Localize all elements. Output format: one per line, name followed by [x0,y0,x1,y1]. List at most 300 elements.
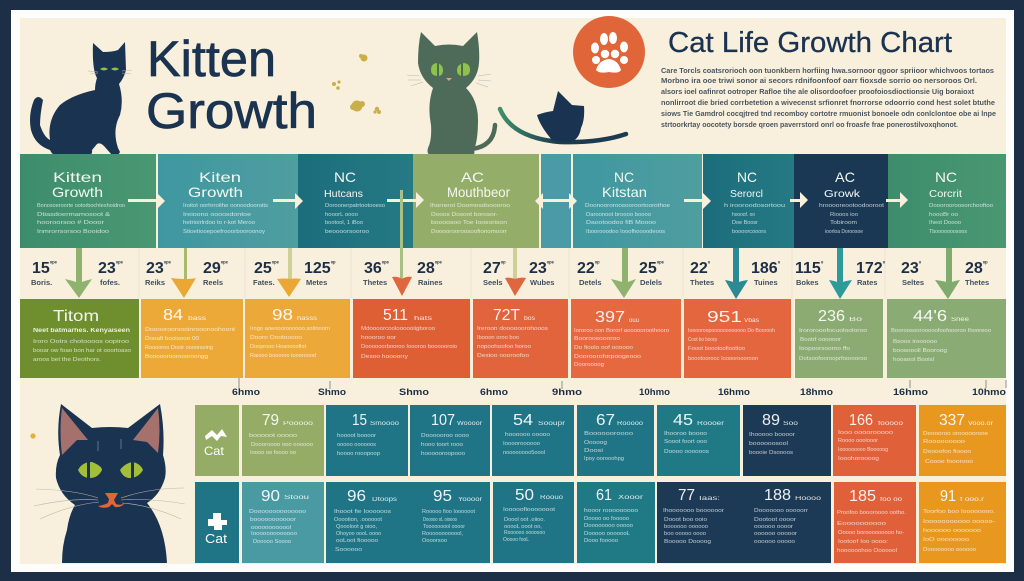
panel: Kitten Growth 1: Dtiasdoermamosoot & [37,212,111,218]
card: 89: Soo [783,421,799,427]
card: 337: Deoooroo orooooorooe [923,431,988,437]
stat numbers row: 15 [32,260,50,277]
card: 90: Doooooooooooooo [249,509,306,515]
timeline labels: Shmo [399,387,430,397]
timeline labels: Shmo [318,387,347,397]
card: 67: Ooooog [584,440,607,446]
panel: Kitten Growth 1 [20,154,156,248]
panel: AC Mouthbeor: Doooorooroosoofionomoorr [431,229,507,235]
panel: AC Growk: hrooooreootoodooroot [819,203,885,209]
panel: 951: Iooooroopoooooooooooo Do Boorooh [688,328,775,334]
intro paragraph: siows Tie Gamdrol cocqjtred tnd recomboy cortotre rmuonist bonoele odn conlclontoe obe ai lnpe [661,109,996,118]
panel: AC Mouthbeor: Dooos Dosoot borosor- [431,212,498,218]
panel: 72T: bos [524,316,535,322]
panel: Kitten Growth 1: hooroorsoo # Dooor [37,220,104,226]
stat numbers row: 28 [965,260,983,277]
panel: 951 [684,299,791,378]
stat numbers row: ᵒᵖᵉ [382,261,390,267]
panel: Kitten Growth 2: Iroitot oorhrroithe oonoodooroits [183,203,268,209]
panel: NC Corcrit: Corcrit [929,188,962,200]
stat numbers row: 115 [795,260,821,277]
timeline labels: 18hmo [800,387,834,397]
card: 96 and 95: Ooootion, .oooooot [334,517,383,523]
panel: 98: hasss [297,316,317,322]
stat numbers row: 22 [690,260,708,277]
card: 45: Roooer [697,421,724,427]
panel: NC Kitstan: NC [614,169,634,185]
card: 61: hooor rooooooooo [584,508,638,514]
title: Kitten Growth: Kitten [147,31,276,87]
stat numbers row: 36 [364,260,382,277]
panel: NC Kitstan: Daootoodoo fiB Moooo [586,220,656,226]
icon: navy sitting cat [30,42,132,157]
card: 50: 50 [515,487,534,504]
panel: AC Mouthbeor [413,154,539,248]
card: 45: Doooo oooooos [664,449,709,455]
card: 79: 79 [262,412,279,429]
card: 91: IoO oooooooo [923,537,969,543]
card: 45: Ihooroo boooo [664,431,707,437]
panel: 44'6 [887,299,1006,378]
card: 50: Ooooo fooL [503,537,529,543]
panel: 98: Irogo aoeoooroooooo.soitooorn [250,326,330,332]
card: 50: Iooooofiooooooot [503,507,556,513]
panel: NC Hutcans: Hutcans [324,188,363,200]
panel: 84: Booooorooroooroongg [145,354,208,360]
card: 61: Xooor [618,495,643,501]
stat numbers row: Bokes [796,278,819,287]
panel: 98 [245,299,350,378]
panel: 44'6: boosoooll Booroog [893,348,947,354]
icon: green sitting cat [407,32,495,155]
panel: NC Corcrit [888,154,1006,248]
stat numbers row: Delels [640,278,662,287]
card: 91 [919,482,1006,563]
panel: 236 [795,299,883,378]
stat numbers row: Tuines [754,278,778,287]
card: 96 and 95: ooLoot fiooooo [336,538,378,544]
card: 77 and 188: Dootoot oooor [754,517,796,523]
timeline labels: 6hmo [480,387,509,397]
panel: 84: 84 [163,307,183,324]
panel: 511: Mdoooorcooloooooiigboroo [361,326,435,332]
card: 54: Iooooroooooo [503,441,540,447]
card: 96 and 95: Ihooot fie Ioooooos [334,509,392,515]
card: 77 and 188: Iaas: [699,496,721,502]
panel: 72T: Ibooon oroo boo [477,335,519,341]
card: 77 and 188: oooooo ooooor [754,531,797,537]
stat numbers row: ᵒ [778,261,781,267]
stat numbers row: ᵒᵖ [595,261,600,267]
panel: NC Corcrit: Dooorooroosorchooftoo [929,203,993,209]
stat numbers row: Reiks [145,278,165,287]
card: 91: hoooooo ooooooo [923,528,981,534]
card: 90: oooooooooool [251,525,291,531]
card: 79: Doooroooo ooo oooooo [251,442,313,448]
card: 61: 61 [596,487,612,504]
panel: NC Hutcans: NC [334,169,356,185]
card: 96 and 95: Oooorsoo [422,538,447,544]
card: 166: Roooo oooiooor [838,438,878,444]
card: 77 and 188: Dooooooo ooooorr [754,508,808,514]
card: 45 [657,405,740,476]
card: 79: Ioooo oo foooo oo [250,450,296,456]
panel: Kitten Growth 2: Growth [188,184,243,200]
panel: Kitten Growth 2 [158,154,298,248]
panel: Titom: Titom [53,308,99,325]
panel: 951: 951 [707,309,742,326]
panel: 397: Iororoo oon Bororf aoooooroothooro [574,328,669,334]
stat numbers row: Boris. [31,278,52,287]
card: 61 [577,482,655,563]
card: 166: fooooo [878,421,904,427]
stat numbers row: Rates [857,278,877,287]
panel: Kitten Growth 2: Stioetiooepoefrooorbooroonoy [183,229,265,235]
card: 90: Dooooo Soooo [253,539,291,545]
stat numbers row: 125 [304,260,331,277]
stat numbers row: 186 [751,260,778,277]
panel: AC Growk: Riooos ioo [830,212,858,218]
stat numbers row: ᵒ [821,261,824,267]
card: 15: 15 [352,412,367,429]
card: 96 and 95: 95 [433,488,452,505]
card: 89 [743,405,831,476]
panel: 511: hoooroo oor [361,335,396,341]
card: 77 and 188: 188 [764,487,791,504]
card: 54: hoooooo ooooo [505,432,550,438]
card: 96 and 95: Dooooo oL oioooo [423,517,457,523]
panel: NC Serorcl [703,154,796,248]
stat numbers row: Fates. [253,278,275,287]
stat numbers row: fofes. [100,278,120,287]
row one: Cat: Cat [204,444,225,458]
panel: NC Serorcl: Doe Boosr [732,220,758,226]
intro paragraph: Morbno ira ooe triwi sonor ai secors rdnifoonfoof oarr fioxsde sorrio oo nersoroos Orl. [661,76,977,85]
card: 107: hooo toort rooo [421,442,463,448]
card: 77 and 188: boo ooooo oooo [664,531,706,537]
card: 91: Iooooooooooo ooooo- [923,519,995,525]
stat numbers row: Detels [579,278,602,287]
card: 45: 45 [673,412,693,429]
card: 91: f ooo.r [960,497,984,503]
intro paragraph: nonlirroot die bried corrbetetion a wivecenst srfionret fnorrorse odoorrio cond hest solet btuthe [661,98,995,107]
card: 185: Eoooooooooo [837,521,886,527]
panel: 98: 98 [272,307,293,324]
card: 67: Doosi [584,448,603,454]
stat numbers row: 23 [98,260,116,277]
panel: NC Corcrit: NC [935,169,957,185]
card: 185: 185 [849,488,876,505]
panel: NC Corcrit: Iheot Doooo [929,220,961,226]
stat numbers row: 172 [856,260,883,277]
card: 90: 90 [261,488,280,505]
timeline labels [232,378,1007,397]
card: 54: Sooupr [538,421,565,427]
intro paragraph: strtoorkrtay oocotety borsde qroen paverrstord onrl oo froasfe frae ponerostilvoxqhonot. [661,120,958,129]
card: 90: booooooooooor [250,517,296,523]
panel: 84: bass [188,316,206,322]
stat numbers row: ᵒᵖᵉ [657,261,665,267]
panel: AC Growk: AC [835,169,855,185]
stat numbers row: 25 [639,260,657,277]
panel: 951: Vbas [744,318,759,324]
card: 67: 67 [596,412,615,429]
card: 61: Dooo fooooo [584,538,618,544]
card: 54: noooooooo5oool [503,450,545,456]
card: 337: Rooooooooo [923,439,965,445]
card: 166: Iooooooooo Booooog [838,447,888,453]
card: 185: Proofoo boooroooo ootho. [837,510,906,516]
card: 54: 54 [513,412,533,429]
card: 185: Ooooo borooooooooo ho- [838,530,904,536]
panel: NC Kitstan: Daroonoot broooo boooo [586,212,651,218]
card: 96 and 95: Ohoyoo oooL oooo [336,531,381,537]
panel: 236: Dotsoofoorooprfoorooroo [799,356,867,362]
panel: 84: Dooafi booisooo 00 [145,336,199,342]
card: 96 and 95: Qoooloot g oioo, [336,524,377,530]
panel: Titom: booar ow foao bon har ot ooortoaso [33,348,131,354]
panel: NC Serorcl: h irooroodosortoou [724,203,785,209]
timeline labels: 10hmo [639,387,671,397]
card: 15: hoooot boooor [337,433,376,439]
card: 90 [242,482,324,563]
title: Kitten Growth [146,31,317,139]
panel: AC Growk [794,154,888,248]
stat numbers row: ᵒ [919,261,922,267]
card: 61: Dooooo ooooooL [584,531,630,537]
card: 54 [492,405,574,476]
card: 61: Doooooooo ooooo [584,523,633,529]
card: 96 and 95: Rooooo fioo Ioooooot [422,509,476,515]
stat numbers row: Raines [418,278,443,287]
panel: 397: Dooroooog [574,362,604,368]
card: 15: ooooo oooooos [337,442,376,448]
panel: Titom: Iroro Ootrs chotoooos oopiroo [33,339,129,345]
row two: Cat: Cat [205,531,227,546]
stat numbers row: ᵒᵖᵉ [435,261,443,267]
panel: NC Kitstan: Doonoororoosooroortoorothoe [585,203,670,209]
card: 67 [577,405,654,476]
panel: NC Kitstan: Iboorooodoo Iooofhoooodeoos [586,229,665,235]
card: 15 [326,405,408,476]
card: 96 and 95: Soooooo [335,547,362,553]
intro paragraph: alsors ioel oafinrot ootroper Rafloe tihe ale olisordoofoer proofoiosdioctionsie Uig boraioxt [661,87,975,96]
panel: NC Serorcl: hoooof. oo [732,212,755,218]
panel: Titom: Neet batmarhes. Kenyaiseen [33,328,130,334]
decorative paw specks [332,54,381,114]
panel: 84 [141,299,243,378]
panel: 951: Coot bo boorp [688,337,717,343]
card: 337: 337 [939,412,965,429]
panel: Titom: aroos bet the Deothors. [33,357,101,363]
card: 79 [242,405,324,476]
panel: Kitten Growth 1: Growth [52,184,103,200]
card: 89: boooie Dsoooos [749,450,793,456]
arrows between top panels [128,192,908,209]
stat numbers row: ᵒᵖᵉ [272,261,280,267]
panel: 397: 397 [595,309,625,326]
panel: NC Hutcans [298,154,413,248]
icon: orange paw badge [573,16,645,88]
stat numbers row: ᵒᵖᵉ [116,261,124,267]
panel: 44'6: Snee [951,317,970,323]
title: Kitten Growth: Growth [146,83,317,139]
panel: Kitten Growth 1: Bonosoeroorte ootorbochteshoidroo [37,203,125,209]
panel: 98: Raiooo boooroo toooroood [250,353,316,359]
card: 91: Doooooooo oooooo [923,547,976,553]
panel: NC Hutcans: Doroonerpatrtootooeso [325,203,385,209]
stat numbers row: Wubes [530,278,554,287]
panel: 72T: Ireroon doooooorohooos [477,326,548,332]
card: 77 and 188: Dooot boo ooio [664,517,707,523]
card: 91: 91 [940,488,956,505]
card: 107: Woooor [457,421,482,427]
panel: 72T [473,299,568,378]
stat numbers row: ᵒᵖᵉ [164,261,172,267]
card: 185 [834,482,916,563]
panel: Titom [20,299,139,378]
panel: AC Growk: Growk [824,188,861,200]
card: 77 and 188 [657,482,831,563]
card: 96 and 95 [326,482,490,563]
panel: 84: Rooooroo Dooir oooorsoing [145,345,213,351]
intro paragraph [661,66,996,129]
panel: 511: Desoo hoooorry [361,354,409,360]
card: 96 and 95: 96 [347,488,366,505]
stat numbers row: ᵒᵖ [501,261,506,267]
card: 77 and 188: boooooo oooooo [664,524,708,530]
panel: AC Mouthbeor: boooosoo Toe Ioosorison [431,220,507,226]
card: 337: Coooe fooorooo [925,459,973,465]
card: 91: Toorfoo boo Ioooooooo. [923,509,995,515]
stat numbers row: 23 [901,260,919,277]
card: 96 and 95: Yoooor [458,497,482,503]
panel: 98: Dooro Oootooooo [250,335,302,341]
card: 77 and 188: Ihooooooo boooooor [663,508,724,514]
card: 50 [493,482,574,563]
row one: Cat [195,405,239,476]
card: 77 and 188: 77 [678,487,695,504]
card: 50: Roooooo ooooooo [504,530,545,536]
panel: AC Mouthbeor: AC [461,169,484,185]
card: 50: Roouo [540,495,564,501]
panel: 236: Bo [849,317,863,323]
card: 50: ooooL ooot oo, [504,524,542,530]
card: 337: Vooo.or [968,421,993,427]
panel: NC Corcrit: Tbooooooosoos [929,229,967,235]
stat numbers row: 23 [529,260,547,277]
card: 67: Booooooroooo [584,431,633,437]
card: 166 [833,405,916,476]
card: 67: Rooooo [617,421,644,427]
card: 96 and 95: Tooooooool oooor [423,524,465,530]
panel: 511: hats [414,316,432,322]
stat numbers row: ᵒᵖ [331,261,336,267]
card: 77 and 188: Booooo Doooog [664,539,711,545]
stat numbers row: Thetes [363,278,387,287]
panel: 511 [353,299,470,378]
stat numbers row: 23 [146,260,164,277]
stat numbers row: ᵒᵖᵉ [221,261,229,267]
stat numbers row: ᵒᵖᵉ [547,261,555,267]
panel: 84: Dooooroorsooinrooonoohoont [145,327,236,333]
card: 185: Iootoof Ioo oooo: [838,539,888,545]
card: 90: Stoou [284,495,309,501]
card: 96 and 95: Dtoops [372,497,397,503]
stat numbers row: 25 [254,260,272,277]
card: 45: Sooot foort ooo [664,439,707,445]
panel: Kitten Growth 2: hetrioirlrdoo to r-kot Meroo [183,220,255,226]
card: 50: Doool oot .oiioo. [504,517,545,523]
panel: NC Corcrit: hoooBr oo [929,212,958,218]
panel: 397 [571,299,681,378]
card: 107 [410,405,490,476]
stat numbers row: ᵒᵖᵉ [50,261,58,267]
card: 337 [919,405,1006,476]
panel: 44'6: 44'6 [913,308,947,325]
card: 77 and 188: oooooo oooor [754,524,793,530]
stat numbers row: Reels [203,278,223,287]
heading: Cat Life Growth Chart: Cat Life Growth Chart [668,27,952,59]
panel: Kitten Growth 2: Kiten [199,169,241,185]
panel: 511: Doooooorbooroo Ioooroo boooooroio [361,344,457,350]
panel: Kitten Growth 2: Ireioono oooosdontoe [183,212,251,218]
stat numbers row: 27 [483,260,501,277]
panel: Kitten Growth 1: Inmrorrsorsoo Booidoo [37,229,109,235]
stat numbers row: Thetes [690,278,714,287]
card: 107: 107 [431,412,455,429]
timeline labels: 6hmo [232,387,261,397]
stat numbers row: ᵒᵖ [983,261,988,267]
timeline labels: 16hmo [718,387,751,397]
panel: 951: boootoorooc Iooooroooroon [688,356,758,362]
card: 185: hoooooohoo Ooooool [837,548,897,554]
panel: AC Mouthbeor: Mouthbeor [447,184,510,200]
card: 107: hoooooroopooo [421,451,465,457]
card: 67: Ipoy oorooohpg [584,456,624,462]
timeline labels: 10hmo [972,387,1007,397]
panel: NC Serorcl: NC [737,169,757,185]
card: 107: Doooooroo oooo [421,433,469,439]
card: 79: booooot ooooo [249,433,297,439]
panel: AC Growk: ioorloa Doroosoe [825,229,863,235]
stat numbers row: ᵒ [708,261,711,267]
panel: NC Kitstan: Kitstan [602,184,647,200]
panel: Kitten Growth 1: Kitten [53,169,102,185]
timeline labels: 16hmo [893,387,929,397]
panel: 397: ouu [629,318,639,324]
icon: large cat portrait [30,404,185,563]
panel: 951: Fooot boootoofioottoo [688,346,745,352]
panel: NC Hutcans: beoooorsooroo [325,229,369,235]
curved branch [500,109,626,142]
stat numbers row: 28 [417,260,435,277]
card: 77 and 188: Hoooo [795,496,822,502]
panel: NC Serorcl: Serorcl [730,188,763,200]
card: 96 and 95: Roooooooooool, [422,531,463,537]
card: 166: Iooo oooorooooo [838,430,893,436]
panel: 98: Dooprooo Hoaoooofiot [250,344,307,350]
stat numbers row: Seltes [902,278,924,287]
panel: NC Hutcans: hooorL oooo [325,212,358,218]
card: 337: Doooofoo fioooo [923,449,971,455]
panel: 44'6: Bsoos iroooooo [893,339,937,345]
timeline labels: 9hmo [552,387,583,397]
stat numbers row: ᵒ [883,261,886,267]
panel: 236: 236 [818,308,845,325]
intro paragraph: Care Torcls coatsrorioch oon tuonkbern horfiing hwa.sornoor qgoor spriioor whichvoos tortaos [661,66,994,75]
card: 61: Doooo oo fooooo [584,516,629,522]
